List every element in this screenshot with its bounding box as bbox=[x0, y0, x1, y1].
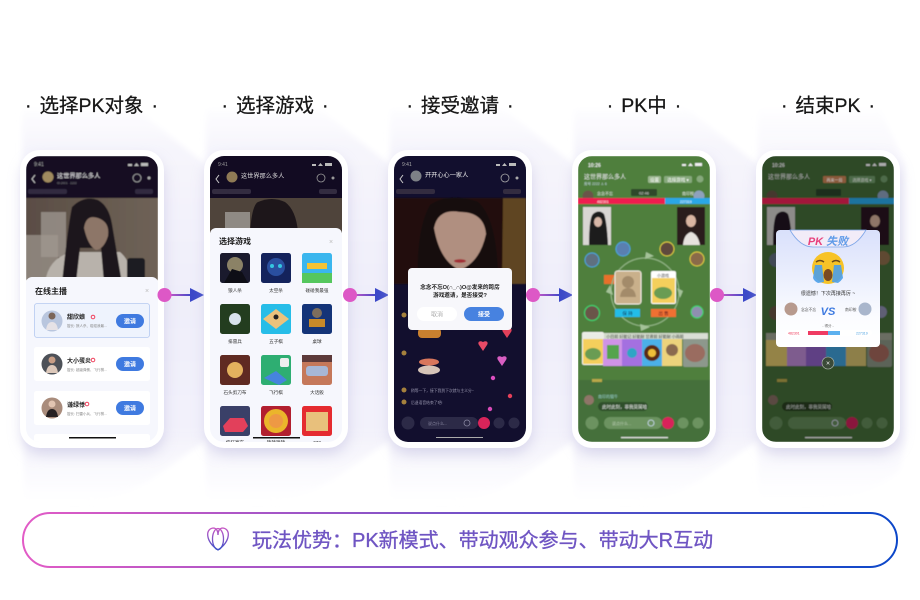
player tokens bbox=[584, 242, 704, 320]
phone 1: choose PK target: 这世界那么多人 bbox=[57, 172, 100, 180]
game: space kill bbox=[261, 253, 291, 294]
dialog close button bbox=[822, 357, 834, 369]
phone 1: choose PK target: 9:41 bbox=[34, 162, 44, 168]
chat stickers: 稍等一下，接下我到下次就与主义分~ bbox=[411, 388, 475, 393]
phone 5: PK ended: 再来一局 bbox=[826, 178, 842, 182]
pick buttons: 出 售 bbox=[658, 310, 669, 317]
dimmed chat: 此时此刻，非我莫属哈 bbox=[786, 404, 831, 410]
phone 3: accept invitation: 9:41 bbox=[402, 162, 412, 168]
arrow 2 bbox=[343, 288, 389, 302]
phone 2: choose game: 9:41 bbox=[218, 162, 228, 168]
phone 2: choose game: 这世界那么多人 bbox=[241, 172, 284, 180]
arrow 1 bbox=[158, 288, 204, 302]
game: gomoku: 五子棋 bbox=[269, 338, 283, 345]
anchor row 1: 甜欣娘 bbox=[67, 313, 85, 321]
score bar: 02:46 bbox=[639, 190, 650, 196]
score bar: 227319 bbox=[680, 200, 692, 204]
anchor row 2: 擅长: 超级弹蛋、飞行棋... bbox=[67, 367, 107, 372]
result dialog: VS bbox=[821, 306, 836, 318]
crying face emoji bbox=[812, 252, 844, 284]
anchor row 3: 邀请 bbox=[124, 404, 136, 412]
bottom toolbar: 说点什么... bbox=[612, 420, 631, 426]
phone 4: in PK: 房号 2222 ♙ 6 bbox=[584, 181, 607, 186]
invitation dialog bbox=[408, 268, 512, 330]
game: rock paper scissors: 石头剪刀布 bbox=[224, 389, 247, 396]
score bar: 念念不忘 bbox=[597, 190, 613, 196]
game: billiards: 桌球 bbox=[312, 338, 322, 345]
dimmed token row bbox=[769, 251, 890, 320]
anchor row 1 bbox=[34, 304, 150, 338]
dimmed toolbar bbox=[770, 416, 888, 430]
invitation dialog: 游戏邀请，是否接受? bbox=[433, 291, 487, 299]
phone 5: PK ended: 这世界那么多人 bbox=[768, 173, 810, 181]
streamer photo bbox=[394, 198, 526, 284]
game selection sheet: 选择游戏 bbox=[219, 236, 251, 246]
circular direction arrows bbox=[606, 252, 683, 331]
phone 5: PK ended bbox=[756, 150, 900, 454]
online anchor sheet bbox=[26, 277, 158, 448]
dimmed score bar bbox=[762, 189, 894, 204]
host video left bbox=[583, 207, 611, 245]
game: minesweeper bbox=[220, 304, 250, 345]
result dialog: 念念不忘 bbox=[801, 307, 816, 312]
phone 4: in PK: 这世界那么多人 bbox=[584, 173, 626, 181]
chat message bbox=[584, 393, 648, 411]
result dialog: 227319 bbox=[856, 332, 868, 336]
game: bump: 碰碰我最强 bbox=[306, 287, 329, 294]
chat message: 此时此刻，非我莫属哈 bbox=[602, 404, 647, 410]
arrow 4 bbox=[710, 288, 757, 302]
anchor row 1: 擅长: 狼人杀、碰碰我最... bbox=[67, 323, 107, 328]
center card: game tile bbox=[651, 271, 676, 304]
icon: interlocked heart bbox=[208, 528, 228, 550]
phone 4: in PK bbox=[572, 150, 716, 454]
anchor row 3: 谦绿悸 bbox=[67, 401, 85, 409]
game: flying chess: 飞行棋 bbox=[269, 389, 283, 396]
chat stickers bbox=[402, 312, 475, 405]
result dialog: 南印桉 bbox=[845, 307, 857, 312]
game selection sheet: × bbox=[329, 239, 333, 246]
invitation dialog: 念念不忘O(∩_∩)O@发来的跨房 bbox=[420, 283, 500, 291]
phone 1: choose PK target: ID:2001 · 2222 bbox=[57, 181, 77, 185]
bottom toolbar bbox=[402, 416, 520, 430]
game: dice bluff: 大话骰 bbox=[310, 389, 324, 396]
game: flying chess bbox=[261, 355, 291, 396]
game: racing: 疯狂赛车 bbox=[226, 439, 245, 446]
phone 2: choose game bbox=[204, 150, 348, 454]
card row bbox=[582, 332, 708, 367]
title: step 1: · 选择PK对象 · bbox=[25, 95, 158, 117]
title: step 2: · 选择游戏 · bbox=[221, 95, 329, 117]
result dialog: 482301 bbox=[788, 332, 800, 336]
chat stickers: 后退语音结束了吧! bbox=[411, 400, 442, 405]
phone 3: accept invitation bbox=[388, 150, 532, 454]
chat message: 南印的猫牛 bbox=[598, 393, 618, 399]
phone 4: in PK: 设置 bbox=[650, 176, 659, 184]
pick buttons: 保 持 bbox=[622, 310, 633, 317]
host video right bbox=[677, 207, 705, 245]
benefits banner bbox=[23, 513, 897, 567]
anchor row 2: 邀请 bbox=[124, 360, 136, 368]
anchor row 2: 大小蛋炎 bbox=[67, 357, 91, 365]
game: billiards bbox=[302, 304, 332, 345]
phone 5: PK ended: 选择游戏 ▾ bbox=[852, 176, 872, 182]
arrow 3 bbox=[526, 288, 573, 302]
phone 5: PK ended: 10:26 bbox=[772, 163, 785, 169]
game: minesweeper: 排雷兵 bbox=[228, 338, 242, 345]
title: step 4: · PK中 · bbox=[607, 95, 681, 117]
anchor row 3 bbox=[34, 391, 150, 425]
bottom toolbar bbox=[586, 416, 704, 430]
title: step 3: · 接受邀请 · bbox=[406, 95, 514, 117]
game selection sheet bbox=[210, 228, 342, 448]
background diagonal bands bbox=[22, 108, 905, 503]
banner text: 玩法优势：PK新模式、带动观众参与、带动大R互动 bbox=[252, 529, 713, 552]
game: wheel: 猜猜猜猜 bbox=[267, 439, 286, 446]
online anchor sheet: 在线主播 bbox=[35, 286, 67, 296]
score bar: 南印桉 bbox=[682, 190, 694, 196]
score bar bbox=[578, 189, 710, 204]
online anchor sheet: × bbox=[145, 288, 149, 295]
pick buttons bbox=[615, 309, 676, 317]
result dialog: - 得分 - bbox=[822, 323, 834, 328]
game: slots bbox=[302, 406, 332, 445]
phone 4: in PK: 10:26 bbox=[588, 163, 601, 169]
result dialog: 很遗憾！下次再接再厉 ~ bbox=[801, 290, 855, 297]
game: werewolf: 狼人杀 bbox=[228, 287, 242, 294]
bottom toolbar: 说点什么... bbox=[428, 420, 447, 426]
phone 3: accept invitation: 开开心心一家人 bbox=[425, 171, 468, 179]
game: slots: 777 bbox=[313, 440, 321, 445]
game: space kill: 太空杀 bbox=[269, 287, 283, 294]
anchor row 3: 擅长: 扫雷小兵、飞行棋... bbox=[67, 411, 107, 416]
anchor row 1: 邀请 bbox=[124, 318, 136, 326]
center card: avatar bbox=[615, 271, 641, 304]
game: werewolf bbox=[220, 253, 250, 294]
game: wheel bbox=[261, 406, 291, 446]
result dialog bbox=[776, 230, 880, 347]
game: bump bbox=[302, 253, 332, 294]
dimmed chat bbox=[768, 395, 832, 411]
phone 1: choose PK target bbox=[20, 150, 164, 454]
score bar: 482301 bbox=[597, 200, 609, 204]
game: rock paper scissors bbox=[220, 355, 250, 396]
game: dice bluff bbox=[302, 355, 332, 396]
card row: 小目前 好能记 好能耐 甘肃前 好能耐 小雨前 bbox=[606, 333, 684, 339]
anchor row 2 bbox=[34, 347, 150, 381]
dimmed host videos bbox=[767, 207, 889, 245]
phone 4: in PK: 选择游戏 ▾ bbox=[667, 176, 689, 184]
floating hearts bbox=[478, 328, 512, 411]
game: racing bbox=[220, 406, 250, 446]
invitation dialog: 取消 bbox=[431, 310, 443, 318]
result dialog: PK 失败 bbox=[808, 235, 850, 248]
center card: game tile: 小游戏 bbox=[657, 272, 669, 278]
title: step 5: · 结束PK · bbox=[781, 95, 875, 117]
dimmed card row bbox=[766, 333, 892, 367]
dialog close button: × bbox=[826, 360, 830, 368]
game: gomoku bbox=[261, 304, 291, 345]
invitation dialog: 接受 bbox=[478, 310, 490, 318]
